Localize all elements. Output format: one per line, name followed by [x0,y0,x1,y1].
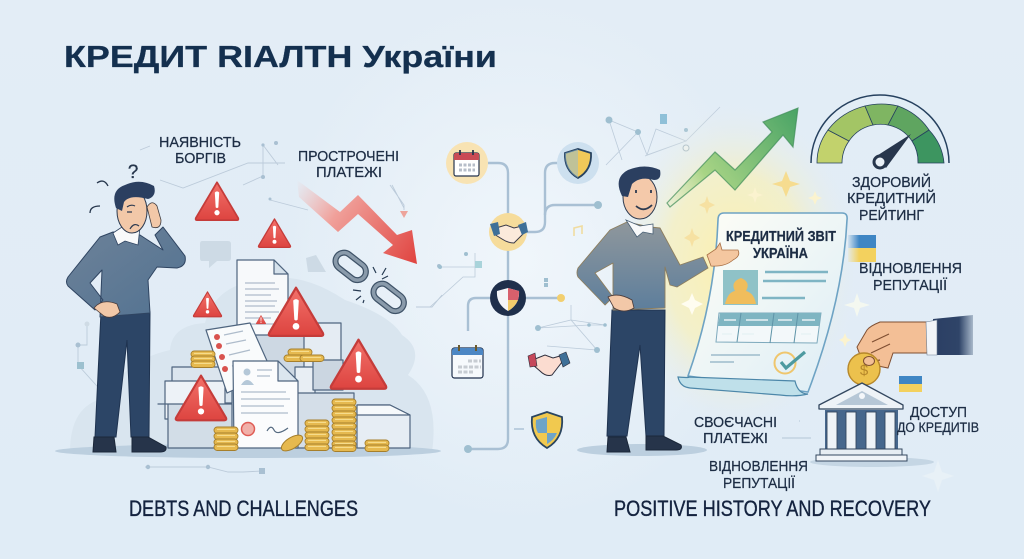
caption: debts and challenges: DEBTS AND CHALLENGES [129,496,358,521]
network nodes left [76,141,441,474]
label: healthy credit rating [847,173,936,224]
label: timely payments [694,414,777,447]
face [127,205,139,229]
label: overdue payments: ПРОСТРОЧЕНІ [298,148,399,165]
coin stack 6 [284,349,324,362]
handshake badge [489,213,528,251]
network nodes [438,116,689,453]
neck and collar [113,225,140,245]
music note icon [574,226,582,236]
thumb [864,356,874,366]
background clouds [70,278,434,452]
sheet footer lines [710,355,760,362]
credit report sheet: УКРАЇНА [753,245,808,262]
worry marks [90,181,108,213]
sheet roll [678,377,808,396]
worried man [66,162,185,452]
label: reputation recovery lower [709,458,808,492]
warning icon 5 [331,340,386,389]
label: overdue payments: ПЛАТЕЖІ [316,164,382,181]
label: reputation recovery lower: РЕПУТАЦІЇ [723,475,796,492]
photo silhouette [725,278,756,304]
sleeve [933,315,973,355]
faint pennant icon [306,255,326,272]
segment 2 [828,106,873,141]
warning icon 4 [269,288,323,336]
collar [626,220,653,237]
legs [95,312,150,437]
credit report sheet [678,213,847,396]
sweater [577,222,708,310]
needle [875,134,911,168]
cuff [926,320,937,355]
head [623,175,657,219]
red falling arrow [297,180,417,264]
ukrainian flag lower [899,376,922,392]
head [117,189,147,233]
label: healthy credit rating: КРЕДИТНИЙ [847,189,936,207]
label: debts: БОРГІВ [175,150,226,167]
warning icon small [256,315,266,324]
right box [357,405,410,448]
label: healthy credit rating: ЗДОРОВИЙ [852,173,931,191]
shoes [607,436,681,452]
coin stack 5 [191,351,215,368]
hair [619,166,660,197]
coin stacks [191,349,389,454]
segment 4 [888,106,929,141]
label: timely payments: СВОЄЧАСНІ [694,414,777,431]
coin stack 3 [332,399,356,452]
label: reputation recovery upper: РЕПУТАЦІЇ [873,277,948,294]
shield badge [557,142,599,184]
report heading: КРЕДИТНИЙ ЗВІТ [726,227,836,245]
segment 5 [912,130,944,163]
bank shadow [810,457,934,467]
calendar badge [446,142,488,184]
hand with coin [848,315,973,385]
label: overdue payments [298,148,399,181]
smiling man [577,166,739,452]
dark shield badge [490,280,526,316]
back top document [237,260,288,345]
label: reputation recovery upper: ВІДНОВЛЕННЯ [859,260,962,277]
bank building [810,383,934,467]
broken chain icon [332,249,407,315]
pointing hand [707,243,739,266]
background glow [280,0,760,520]
hip hand [608,295,634,311]
green rising arrow [667,108,798,207]
title: КРЕДИТ RIАЛТН України [64,40,497,74]
roof [819,383,903,409]
sparkles [681,171,954,492]
panel: debts and challenges [55,134,442,521]
label: access to credit [897,404,979,435]
steps [820,449,902,455]
golden glow [610,100,860,430]
hand [857,322,927,368]
segment 3 [865,104,898,125]
small connector beside label [782,421,811,438]
faint network lines [430,107,720,350]
photo box [723,270,758,305]
document pile [158,260,410,448]
question mark: ? [128,162,138,183]
sweater [66,227,185,317]
middle folders [172,367,232,403]
bank wall [825,410,898,450]
sheet body [688,213,847,392]
calendar icon [452,345,483,378]
device icon [660,114,667,124]
gauge ring [811,95,949,163]
front credit document [233,361,298,448]
label: access to credit: ДО КРЕДИТІВ [897,420,979,435]
needle hub [874,156,886,168]
pediment [836,391,888,405]
ground shadow [55,444,441,458]
warning icon 3 [193,292,222,317]
hand on head [147,203,161,228]
coin stack 4 [365,440,389,452]
caption: positive history and recovery: POSITIVE HISTORY AND RECOVERY [614,496,931,521]
hand on hip [94,302,120,317]
shoes [93,437,166,452]
columns [827,412,895,449]
label: timely payments: ПЛАТЕЖІ [703,430,768,447]
face [636,190,652,209]
warning icon 6 [176,376,226,420]
approval check [774,352,805,374]
panel: positive history and recovery [577,95,979,521]
segment 1 [817,130,849,163]
tilted coin [279,432,305,454]
ukrainian flag upper [848,235,876,262]
handshake icon [528,352,570,376]
credit gauge [811,95,949,168]
label: debts [159,134,241,167]
background network lines left [78,145,442,472]
tilted sheet with red marks [206,323,272,393]
chat bubble icon [200,241,231,268]
label: healthy credit rating: РЕЙТИНГ [859,206,924,224]
label: access to credit: ДОСТУП [910,404,967,421]
coin stack 1 [214,427,238,450]
label: reputation recovery upper [859,260,962,294]
warning icon 2 [258,219,291,247]
panel: connecting network [430,107,720,453]
shield icon [532,412,562,448]
warning icon 1 [196,182,238,220]
connector lines [468,163,598,449]
data table [716,313,821,343]
fingers [870,334,890,362]
ground shadow [577,444,707,456]
coin [848,353,880,385]
hand with coin: $ [860,362,869,379]
sheet lines [762,272,828,298]
hair [114,182,155,211]
legs [607,310,665,436]
coin stack 2 [305,420,329,450]
label: reputation recovery lower: ВІДНОВЛЕННЯ [709,458,808,475]
warning triangles [176,182,386,420]
back right folder [290,323,341,371]
label: debts: НАЯВНІСТЬ [159,134,241,151]
